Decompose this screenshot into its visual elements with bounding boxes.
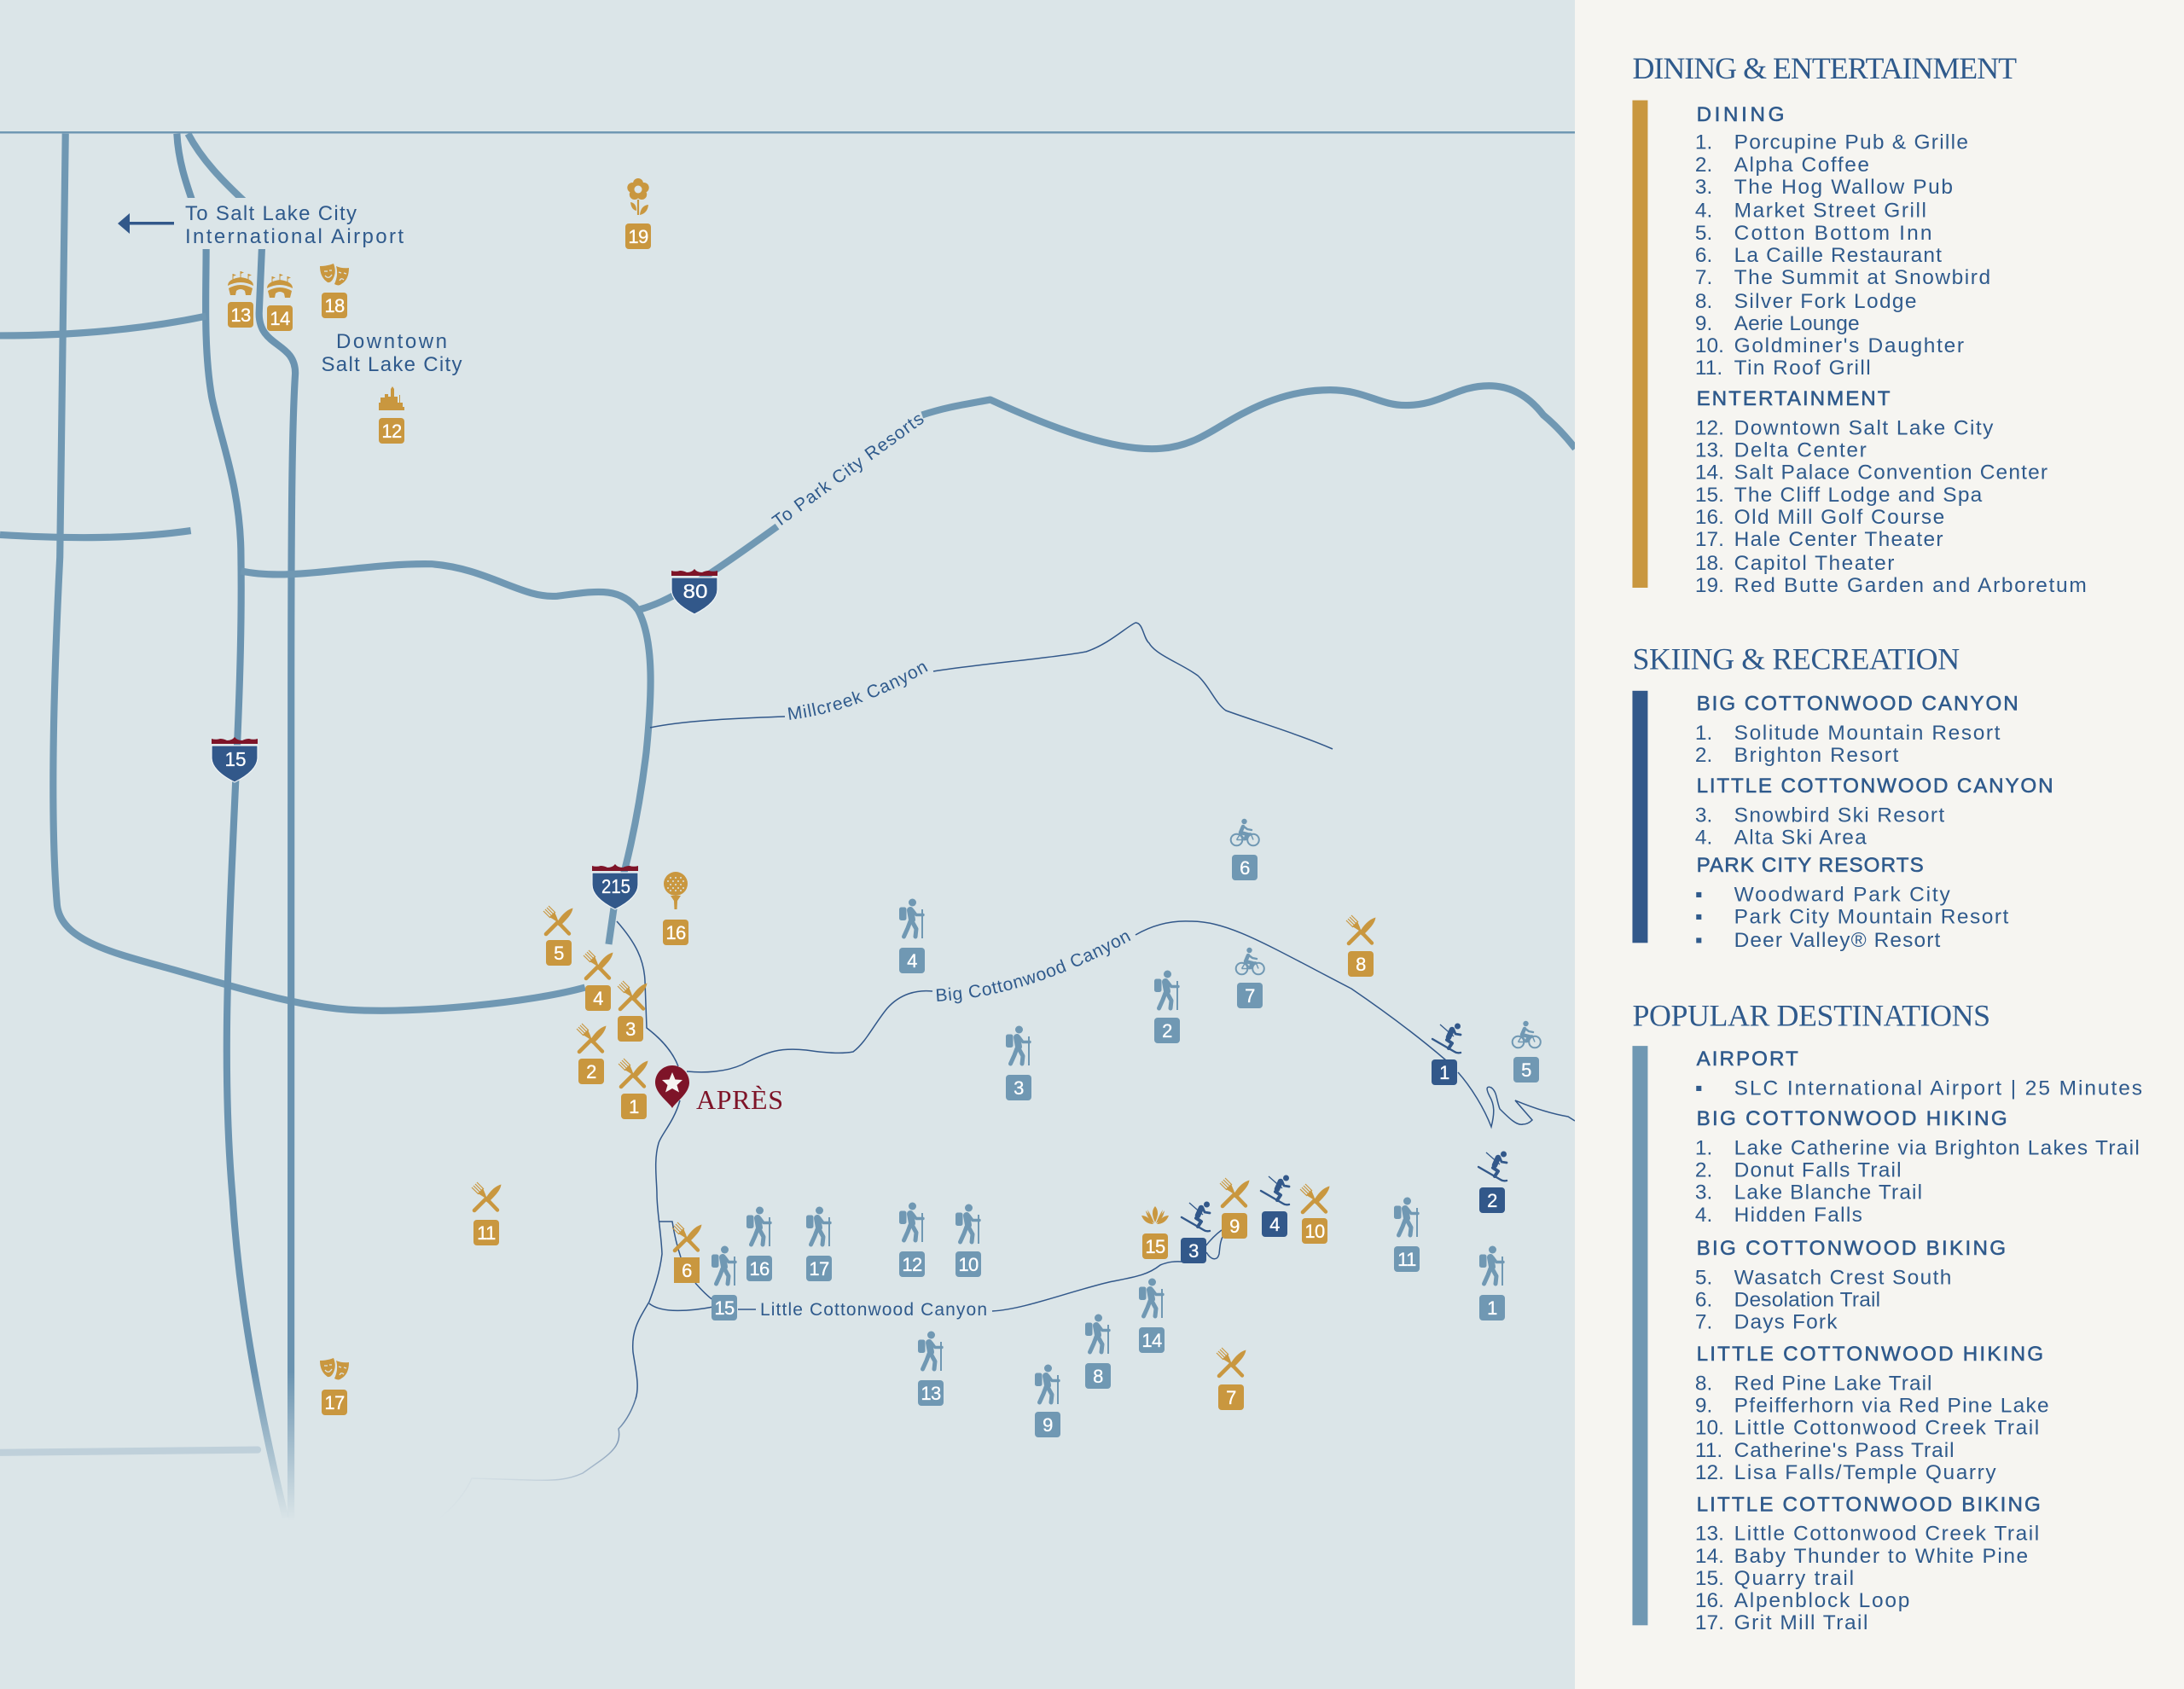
- list: dining: Tin Roof Grill: [1734, 357, 1871, 380]
- list: Park City Resorts: Woodward Park City: [1734, 883, 1950, 906]
- list: dining: Cotton Bottom Inn: [1734, 222, 1931, 245]
- list: dining: 4.: [1695, 200, 1712, 223]
- trail 9: 9: [1043, 1414, 1053, 1436]
- list: Little Cottonwood biking: 16.: [1695, 1589, 1724, 1612]
- list: dining: 8.: [1695, 290, 1712, 313]
- trail 16: 16: [749, 1258, 770, 1280]
- list: Little Cottonwood biking: Baby Thunder to White Pine: [1734, 1545, 2028, 1568]
- shield: I-15: [212, 737, 258, 782]
- trail 9: [1035, 1365, 1060, 1437]
- list: Big Cottonwood Canyon: BIG COTTONWOOD CANYON: [1697, 693, 2018, 716]
- dining markers: [472, 906, 1375, 1410]
- label: Downtown Salt Lake City: [321, 330, 462, 376]
- list: Little Cottonwood hiking: LITTLE COTTONWOOD HIKING: [1697, 1343, 2043, 1366]
- arrow: to airport: [118, 213, 174, 234]
- list: Park City Resorts: [1695, 854, 2008, 952]
- list: Big Cottonwood biking: 7.: [1695, 1311, 1712, 1334]
- list: Park City Resorts: ▪: [1695, 929, 1703, 952]
- list: dining: 7.: [1695, 266, 1712, 289]
- list: Big Cottonwood Canyon: 2.: [1695, 744, 1712, 767]
- list: Little Cottonwood hiking: Pfeifferhorn via Red Pine Lake: [1734, 1395, 2049, 1418]
- ski 4: [1261, 1175, 1289, 1237]
- list: Little Cottonwood hiking: 11.: [1695, 1439, 1722, 1462]
- label: Downtown Salt Lake City: Downtown: [336, 330, 447, 353]
- road: Little Cottonwood Canyon: [649, 1230, 1223, 1311]
- ski 3: 3: [1188, 1240, 1199, 1262]
- list: entertainment: Capitol Theater: [1734, 552, 1894, 575]
- list: dining: 11.: [1695, 357, 1722, 380]
- entertainment 19: Red Butte Garden: [625, 178, 651, 249]
- label: Little Cottonwood Canyon: Little Cottonwood Canyon: [760, 1300, 987, 1320]
- trail 4: 4: [907, 950, 917, 972]
- list: dining: Silver Fork Lodge: [1734, 290, 1917, 313]
- list: entertainment: Hale Center Theater: [1734, 528, 1943, 551]
- list: Little Cottonwood hiking: 12.: [1695, 1461, 1724, 1484]
- label: To Salt Lake City International Airport: International Airport: [185, 225, 404, 248]
- list: entertainment: 16.: [1695, 506, 1724, 529]
- location pin: Après: [655, 1065, 689, 1108]
- heading: Popular Destinations: POPULAR DESTINATIONS: [1632, 998, 1990, 1032]
- list: Little Cottonwood hiking: Catherine's Pass Trail: [1734, 1439, 1955, 1462]
- list: Big Cottonwood biking: Desolation Trail: [1734, 1288, 1880, 1311]
- dining 6: [672, 1222, 701, 1283]
- road: west arterial north: [0, 316, 206, 335]
- list: dining: 3.: [1695, 176, 1712, 199]
- shield: I-15: 15: [225, 748, 246, 770]
- road: to Park City: [638, 386, 1576, 610]
- entertainment 16: golf: [663, 872, 688, 945]
- list: dining: 5.: [1695, 222, 1712, 245]
- list: dining: 10.: [1695, 334, 1724, 357]
- label: To Salt Lake City International Airport: [185, 202, 404, 248]
- list: dining: Market Street Grill: [1734, 200, 1926, 223]
- heading: Dining & Entertainment: DINING & ENTERTAINMENT: [1632, 51, 2017, 85]
- list: Big Cottonwood hiking: 4.: [1695, 1204, 1712, 1227]
- list: Big Cottonwood Canyon: 1.: [1695, 722, 1712, 745]
- list: Little Cottonwood hiking: 10.: [1695, 1417, 1724, 1440]
- entertainment 15: Cliff Lodge spa: 15: [1145, 1236, 1165, 1257]
- dining 10: 10: [1304, 1221, 1325, 1242]
- entertainment 14: Salt Palace: 14: [270, 308, 290, 329]
- trail 1: 1: [1487, 1297, 1497, 1319]
- list: Big Cottonwood biking: 5.: [1695, 1266, 1712, 1289]
- map background: [0, 0, 1576, 1689]
- list: Big Cottonwood hiking: Lake Blanche Trail: [1734, 1181, 1922, 1204]
- list: Little Cottonwood Canyon: 3.: [1695, 804, 1712, 827]
- entertainment 14: Salt Palace: [267, 274, 293, 331]
- trail 13: [918, 1331, 944, 1406]
- list: Little Cottonwood hiking: Little Cottonwood Creek Trail: [1734, 1417, 2039, 1440]
- list: dining: DINING: [1697, 103, 1784, 126]
- list: entertainment: Downtown Salt Lake City: [1734, 416, 1994, 439]
- list: dining: Alpha Coffee: [1734, 154, 1869, 177]
- list: entertainment: 12.: [1695, 416, 1724, 439]
- list: dining: 6.: [1695, 244, 1712, 267]
- list: Big Cottonwood biking: 6.: [1695, 1288, 1712, 1311]
- trail 8: [1085, 1314, 1111, 1389]
- list: airport: AIRPORT: [1697, 1048, 1798, 1071]
- list: Park City Resorts: Deer Valley® Resort: [1734, 929, 1940, 952]
- canyon roads: [438, 623, 1575, 1519]
- list: entertainment: ENTERTAINMENT: [1697, 387, 1891, 410]
- list: Little Cottonwood hiking: 8.: [1695, 1372, 1712, 1395]
- list: Little Cottonwood biking: 13.: [1695, 1523, 1724, 1546]
- list: Big Cottonwood Canyon: Solitude Mountain Resort: [1734, 722, 2001, 745]
- entertainment 13: Delta Center: [228, 271, 253, 328]
- trail 11: [1394, 1198, 1420, 1272]
- road: I-15: [177, 134, 286, 1518]
- road: Millcreek Canyon: [650, 623, 1333, 749]
- list: entertainment: 19.: [1695, 574, 1724, 597]
- list: Big Cottonwood Canyon: Brighton Resort: [1734, 744, 1898, 767]
- list: Little Cottonwood biking: Grit Mill Trail: [1734, 1611, 1867, 1634]
- list: Big Cottonwood hiking: 2.: [1695, 1159, 1712, 1182]
- list: dining: 9.: [1695, 312, 1712, 335]
- list: Big Cottonwood hiking: Lake Catherine via Brighton Lakes Trail: [1734, 1136, 2140, 1159]
- list: Big Cottonwood Canyon: [1695, 693, 2018, 767]
- label: Downtown Salt Lake City: Salt Lake City: [321, 353, 462, 376]
- list: entertainment: [1695, 387, 2087, 597]
- entertainment 16: golf: 16: [665, 922, 686, 943]
- label: To Salt Lake City International Airport: To Salt Lake City: [185, 202, 357, 225]
- list: entertainment: 15.: [1695, 484, 1724, 507]
- list: Little Cottonwood Canyon: [1695, 775, 2053, 849]
- ski 2: [1478, 1152, 1507, 1213]
- entertainment 17: Hale Center Theater: [320, 1358, 349, 1415]
- list: dining: [1695, 103, 1990, 380]
- dining 1: [619, 1059, 648, 1119]
- trail 11: 11: [1397, 1249, 1416, 1270]
- trail 17: 17: [809, 1258, 829, 1280]
- dining 11: [472, 1182, 502, 1245]
- label: APRÈS: APRÈS: [696, 1084, 783, 1115]
- list: Big Cottonwood hiking: Hidden Falls: [1734, 1204, 1862, 1227]
- trail 15: 15: [714, 1297, 735, 1319]
- trail 15: [712, 1245, 737, 1320]
- list: Little Cottonwood Canyon: 4.: [1695, 826, 1712, 849]
- list: airport: SLC International Airport | 25 Minutes: [1734, 1077, 2142, 1100]
- label: Big Cottonwood Canyon: Big Cottonwood Canyon: [937, 932, 1131, 1003]
- list: Big Cottonwood biking: Days Fork: [1734, 1311, 1838, 1334]
- entertainment 18: Capitol Theater: 18: [324, 295, 345, 316]
- list: Park City Resorts: ▪: [1695, 905, 1703, 928]
- skiing markers: [1181, 1024, 1507, 1263]
- trail 17: [806, 1206, 832, 1281]
- list: Little Cottonwood hiking: 9.: [1695, 1395, 1712, 1418]
- highway network: [0, 134, 1576, 1521]
- dining 2: [577, 1024, 606, 1084]
- trail 12: [899, 1203, 925, 1277]
- list: entertainment: Old Mill Golf Course: [1734, 506, 1944, 529]
- list: entertainment: Salt Palace Convention Center: [1734, 461, 2048, 485]
- trail 3: 3: [1014, 1077, 1024, 1099]
- list: Little Cottonwood hiking: [1695, 1343, 2049, 1484]
- trail 12: 12: [902, 1254, 922, 1275]
- list: dining: Porcupine Pub & Grille: [1734, 131, 1968, 154]
- trail 13: 13: [921, 1383, 941, 1404]
- dining 1: 1: [629, 1096, 639, 1117]
- list: Big Cottonwood biking: Wasatch Crest South: [1734, 1266, 1951, 1289]
- ski 1: 1: [1439, 1062, 1449, 1083]
- label: Millcreek Canyon: Millcreek Canyon: [788, 664, 928, 720]
- list: Big Cottonwood biking: BIG COTTONWOOD BIKING: [1697, 1237, 2006, 1260]
- trail 14: [1139, 1278, 1165, 1353]
- list: dining: Aerie Lounge: [1734, 312, 1860, 335]
- entertainment 12: downtown: 12: [381, 421, 402, 442]
- road: southern faded tail: [438, 1399, 636, 1519]
- trail 5 bike: 5: [1521, 1059, 1531, 1081]
- dining 4: 4: [593, 988, 603, 1009]
- list: Big Cottonwood hiking: Donut Falls Trail: [1734, 1159, 1902, 1182]
- road: Wasatch Boulevard south: [633, 1100, 680, 1399]
- ski 3: [1181, 1201, 1210, 1263]
- entertainment 18: Capitol Theater: [320, 264, 349, 318]
- dining 6: 6: [682, 1260, 692, 1281]
- list: dining: La Caille Restaurant: [1734, 244, 1942, 267]
- dining 9: [1220, 1178, 1249, 1239]
- dining 8: 8: [1356, 954, 1366, 975]
- trail 10: [956, 1204, 981, 1277]
- list: Big Cottonwood hiking: 3.: [1695, 1181, 1712, 1204]
- ski 2: 2: [1487, 1190, 1497, 1211]
- list: Little Cottonwood biking: 14.: [1695, 1545, 1724, 1568]
- list: Little Cottonwood Canyon: Alta Ski Area: [1734, 826, 1867, 849]
- shield: I-215: 215: [601, 875, 630, 897]
- trail 14: 14: [1141, 1330, 1162, 1351]
- dining 7: [1217, 1348, 1246, 1410]
- trail 1: [1479, 1245, 1505, 1320]
- list: dining: The Summit at Snowbird: [1734, 266, 1990, 289]
- list: Big Cottonwood hiking: [1695, 1107, 2140, 1227]
- list: Little Cottonwood biking: 17.: [1695, 1611, 1724, 1634]
- list: dining: 1.: [1695, 131, 1712, 154]
- list: Park City Resorts: ▪: [1695, 883, 1703, 906]
- list: Little Cottonwood biking: Little Cottonwood Creek Trail: [1734, 1523, 2039, 1546]
- list: dining: The Hog Wallow Pub: [1734, 176, 1953, 199]
- list: dining: 2.: [1695, 154, 1712, 177]
- dining 4: [584, 950, 613, 1011]
- trail 6 bike: 6: [1240, 857, 1250, 879]
- list: Little Cottonwood hiking: Red Pine Lake Trail: [1734, 1372, 1931, 1395]
- entertainment 12: downtown: [379, 386, 404, 444]
- trail 7 bike: [1236, 948, 1264, 1008]
- list: dining: Goldminer's Daughter: [1734, 334, 1964, 357]
- road: far west route: [53, 134, 585, 1011]
- hiking and biking markers: [712, 819, 1541, 1437]
- dining 5: 5: [554, 943, 564, 964]
- trail 7 bike: 7: [1245, 985, 1255, 1007]
- trail 2: [1154, 971, 1180, 1043]
- label background: road break at airport label: [175, 198, 418, 249]
- dining 8: [1346, 915, 1375, 977]
- shield: I-80: 80: [682, 580, 708, 602]
- list: entertainment: 18.: [1695, 552, 1724, 575]
- top boundary line: [0, 131, 1576, 133]
- list: Little Cottonwood biking: LITTLE COTTONWOOD BIKING: [1697, 1493, 2041, 1516]
- bar: destinations: [1632, 1046, 1647, 1625]
- list: Big Cottonwood biking: [1695, 1237, 2006, 1334]
- entertainment markers: [228, 178, 1169, 1415]
- list: Big Cottonwood hiking: BIG COTTONWOOD HIKING: [1697, 1107, 2007, 1130]
- list: entertainment: 17.: [1695, 528, 1724, 551]
- dining 2: 2: [586, 1061, 596, 1082]
- list: entertainment: Delta Center: [1734, 439, 1867, 462]
- list: Little Cottonwood biking: Alpenblock Loop: [1734, 1589, 1909, 1612]
- road: I-15 parallel route: [259, 248, 295, 1521]
- dining 9: 9: [1229, 1216, 1240, 1237]
- road: I-80 and I-215: [241, 564, 651, 944]
- panel: legend: [1575, 0, 2184, 1689]
- list: entertainment: Red Butte Garden and Arboretum: [1734, 574, 2087, 597]
- list: Little Cottonwood hiking: Lisa Falls/Temple Quarry: [1734, 1461, 1996, 1484]
- shield: I-80: [671, 569, 717, 614]
- trail 16: [746, 1206, 772, 1281]
- dining 5: [543, 906, 573, 966]
- list: airport: [1695, 1048, 2142, 1100]
- road: downtown connector: [188, 134, 245, 202]
- entertainment 17: Hale Center Theater: 17: [324, 1392, 345, 1413]
- trail 4: [899, 899, 925, 973]
- list: entertainment: 14.: [1695, 461, 1724, 485]
- list: Park City Resorts: PARK CITY RESORTS: [1697, 854, 1924, 877]
- dining 3: 3: [625, 1019, 636, 1040]
- list: airport: ▪: [1695, 1077, 1703, 1100]
- trail 6 bike: [1231, 819, 1259, 880]
- entertainment 13: Delta Center: 13: [230, 305, 251, 326]
- list: Little Cottonwood Canyon: LITTLE COTTONWOOD CANYON: [1697, 775, 2053, 798]
- trail 3: [1006, 1025, 1031, 1100]
- trail 5 bike: [1513, 1021, 1541, 1082]
- dining 7: 7: [1226, 1387, 1236, 1408]
- list: Little Cottonwood biking: [1695, 1493, 2041, 1634]
- trail 2: 2: [1162, 1020, 1172, 1042]
- label: To Park City Resorts: To Park City Resorts: [769, 409, 927, 531]
- road: La Caille access: [659, 1222, 714, 1301]
- bar: dining: [1632, 101, 1647, 588]
- dining 10: [1300, 1184, 1329, 1244]
- heading: Skiing & Recreation: SKIING & RECREATION: [1632, 641, 1960, 676]
- road: Big Cottonwood Canyon: [617, 921, 1575, 1127]
- list: Little Cottonwood biking: 15.: [1695, 1567, 1724, 1590]
- ski 1: [1432, 1024, 1461, 1085]
- list: Little Cottonwood Canyon: Snowbird Ski Resort: [1734, 804, 1944, 827]
- dining 11: 11: [477, 1222, 496, 1244]
- list: Little Cottonwood biking: Quarry trail: [1734, 1567, 1854, 1590]
- trail 10: 10: [958, 1254, 979, 1275]
- road: southern faded route: [0, 1450, 258, 1453]
- list: entertainment: 13.: [1695, 439, 1724, 462]
- dining 3: [618, 981, 647, 1042]
- list: Big Cottonwood hiking: 1.: [1695, 1136, 1712, 1159]
- list: entertainment: The Cliff Lodge and Spa: [1734, 484, 1983, 507]
- entertainment 19: Red Butte Garden: 19: [628, 226, 648, 247]
- bar: skiing: [1632, 691, 1647, 943]
- shield: I-215: [592, 864, 638, 909]
- entertainment 15: Cliff Lodge spa: [1141, 1206, 1169, 1259]
- road: west arterial south: [0, 531, 191, 537]
- trail 8: 8: [1093, 1366, 1103, 1387]
- ski 4: 4: [1269, 1214, 1280, 1235]
- list: Park City Resorts: Park City Mountain Resort: [1734, 905, 2008, 928]
